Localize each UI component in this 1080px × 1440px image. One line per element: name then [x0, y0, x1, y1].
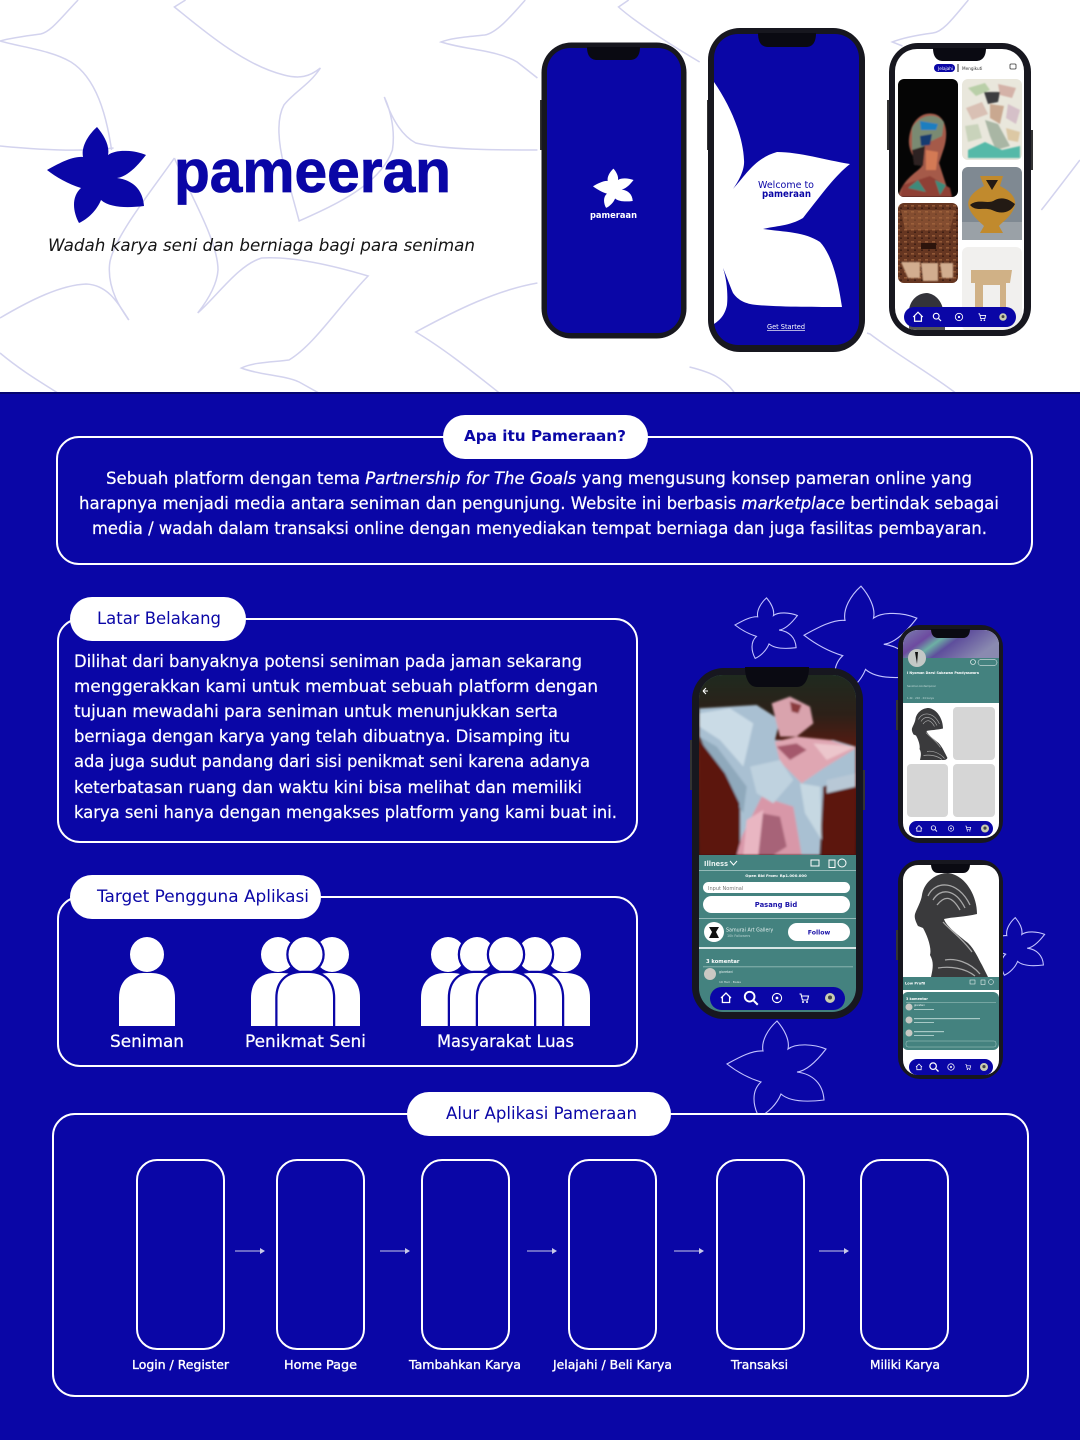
phone: artwork bid screen: 19 Hari · Balas [719, 980, 741, 984]
phone: artist profile screen [896, 625, 1003, 843]
panel: latar belakang: keterbatasan ruang dan waktu kini bisa melihat dan memiliki [74, 778, 582, 797]
flow step: login [132, 1160, 230, 1372]
panel: latar belakang: Latar Belakang [97, 609, 221, 628]
phone: welcome screen: pameraan [762, 189, 811, 200]
phone: artwork bid screen: Samurai Art Gallery [726, 928, 773, 934]
tagline: Wadah karya seni dan berniaga bagi para seniman [48, 236, 475, 255]
panel: latar belakang: ada juga sudut pandang dari sisi penikmat seni karena adanya [74, 752, 590, 771]
flow step: transaksi [717, 1160, 804, 1372]
decorative flower outlines [727, 586, 1045, 1117]
arrow [527, 1248, 557, 1254]
icon: five people [421, 937, 590, 1026]
arrow [380, 1248, 410, 1254]
panel: latar belakang [58, 597, 637, 842]
phone: splash screen [540, 42, 686, 338]
flow step: login: Login / Register [132, 1357, 230, 1372]
phone: artist profile screen: Seniman kontemporer [907, 684, 937, 688]
phone: artwork detail screen: 3 komentar [906, 997, 928, 1001]
panel: latar belakang: berniaga dengan karya yang telah dibuatnya. Disamping itu [74, 727, 570, 746]
phone: explore gallery screen: Mengikuti [962, 66, 982, 71]
painting: batik masks [898, 203, 958, 283]
painting: wooden stool [962, 247, 1022, 331]
bottom nav bar [710, 987, 845, 1010]
icon: single person [119, 937, 175, 1026]
phone: artwork bid screen: Pasang Bid [755, 901, 797, 909]
phone: explore gallery screen: Jelajahi [937, 66, 953, 71]
phone: artwork bid screen [690, 667, 865, 1019]
painting: abstract head [898, 79, 958, 197]
painting: anguished figure [699, 675, 856, 855]
phone: artwork detail screen: gioretani [914, 1004, 925, 1007]
phone: artwork bid screen: Input Nominal [708, 886, 743, 892]
bottom nav bar [909, 1059, 993, 1075]
phone: artwork bid screen: Open Bid From: Rp1.000.000 [745, 873, 807, 878]
bottom nav bar [904, 307, 1016, 327]
phone: welcome screen: Welcome to [758, 180, 814, 191]
panel: apa itu pameraan: media / wadah dalam transaksi online dengan menyediakan tempat berniaga dan juga fasilitas pembayaran. [92, 519, 987, 538]
label: seniman: Seniman [110, 1032, 184, 1051]
hero background [0, 0, 1080, 395]
phone: artist profile screen: I Nyoman Darsi Sukawan Pandyaswara [907, 671, 980, 675]
panel: alur aplikasi pameraan: Alur Aplikasi Pameraan [446, 1104, 637, 1123]
panel: latar belakang: Dilihat dari banyaknya potensi seniman pada jaman sekarang [74, 652, 582, 671]
panel: target pengguna aplikasi: Target Pengguna Aplikasi [96, 887, 309, 906]
panel: latar belakang: karya seni hanya dengan mengakses platform yang kami buat ini. [74, 803, 617, 822]
logo flower [47, 127, 146, 223]
panel: apa itu pameraan: Apa itu Pameraan? [464, 427, 626, 445]
panel: latar belakang: menggerakkan kami untuk membuat sebuah platform dengan [74, 677, 598, 696]
arrow [819, 1248, 849, 1254]
flow step: jelajahi [552, 1160, 672, 1372]
label: penikmat seni: Penikmat Seni [245, 1032, 366, 1051]
painting: dancer [962, 79, 1022, 160]
phone: welcome screen: Get Started [767, 323, 805, 331]
phone: artwork bid screen: 3 komentar [706, 959, 740, 965]
painting: vase [962, 167, 1022, 240]
bottom nav bar [909, 821, 993, 836]
phone: explore gallery screen [887, 43, 1033, 336]
flow step: transaksi: Transaksi [730, 1357, 788, 1372]
phone: artist profile screen: 1.2k · 210 · 24 karya [907, 696, 934, 700]
flow step: home page [277, 1160, 364, 1372]
panel: apa itu pameraan: Sebuah platform dengan tema Partnership for The Goals yang mengusung konsep pameran online yang [106, 469, 972, 488]
panel: apa itu pameraan: harapnya menjadi media antara seniman dan pengunjung. Website ini berbasis marketplace bertindak sebagai [79, 494, 999, 513]
phone: artwork detail screen: Low Profil [905, 982, 925, 986]
logo wordmark: pameeran [174, 138, 451, 205]
arrow [235, 1248, 265, 1254]
label: masyarakat luas: Masyarakat Luas [437, 1032, 574, 1051]
flow step: tambahkan karya: Tambahkan Karya [408, 1357, 521, 1372]
panel: alur aplikasi pameraan [53, 1092, 1028, 1396]
phone: splash screen: pameraan [590, 211, 637, 221]
flow step: tambahkan karya [408, 1160, 521, 1372]
flow step: miliki karya: Miliki Karya [870, 1357, 940, 1372]
flow step: home page: Home Page [284, 1357, 357, 1372]
panel: apa itu pameraan [57, 415, 1032, 564]
phone: artwork bid screen: 10k Followers [727, 934, 750, 938]
panel: target pengguna aplikasi [58, 875, 637, 1066]
phone: artwork bid screen: gioretani [719, 970, 733, 974]
phone: artwork bid screen: Follow [808, 930, 831, 936]
flow step: jelajahi: Jelajahi / Beli Karya [552, 1357, 672, 1372]
arrow [674, 1248, 704, 1254]
flow step: miliki karya [861, 1160, 948, 1372]
panel: latar belakang: tujuan mewadahi para seniman untuk menunjukkan serta [74, 702, 558, 721]
phone: artwork detail screen [896, 860, 1003, 1079]
illness title row: Illness [704, 860, 728, 868]
phone: welcome screen [707, 28, 865, 352]
icon: three people [251, 937, 360, 1026]
